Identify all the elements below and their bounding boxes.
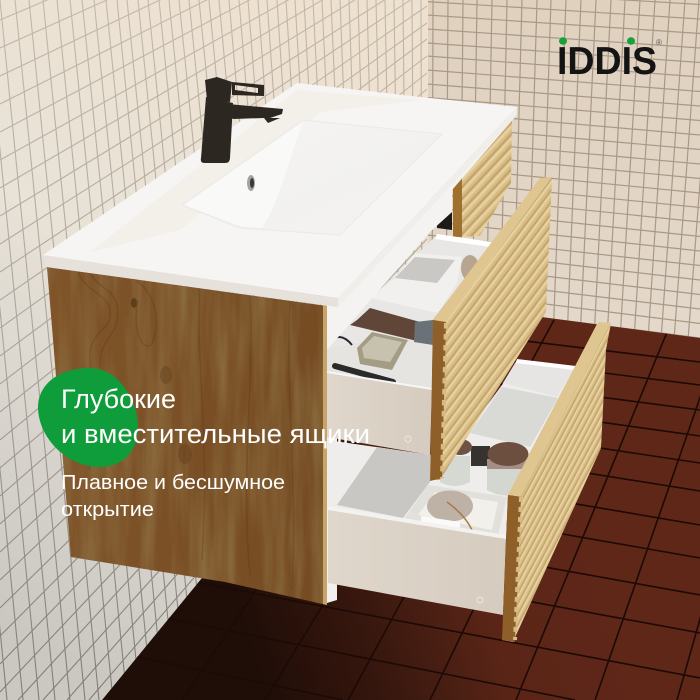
gap behind the drawer: [437, 212, 452, 230]
upper drawer side panel: [327, 373, 432, 455]
interior panel: [327, 235, 492, 390]
top band: [508, 322, 611, 497]
counter front edge: [43, 255, 338, 307]
back wall tiles: [427, 0, 700, 340]
wood knot: [178, 444, 192, 464]
faucet body: [201, 97, 233, 163]
green blob: [38, 368, 138, 467]
counter top surface: [43, 83, 517, 298]
basin slope: [184, 122, 303, 228]
counter right edge: [338, 107, 517, 307]
subheading: открытие: [61, 498, 154, 521]
cabinet wood side: [40, 260, 330, 610]
logo green dot: [559, 37, 567, 45]
left wall tiles: [0, 0, 428, 700]
closed drawer wood edge: [453, 176, 462, 237]
soap tray: [405, 485, 507, 535]
closed top drawer: [437, 120, 512, 237]
basin: [182, 120, 442, 235]
logo green dot: [627, 37, 635, 45]
back rim: [516, 359, 576, 370]
wood cathedral grain: [78, 272, 294, 590]
grey drawer floor: [337, 447, 430, 518]
brush: [350, 308, 433, 345]
soap bar: [421, 516, 460, 528]
upper open drawer interior: [327, 234, 492, 455]
subheading: Плавное и бесшумное: [61, 471, 285, 494]
pumice stone: [427, 490, 473, 522]
dark sponge: [471, 446, 490, 466]
end strip teeth: [442, 323, 446, 478]
box inner: [395, 257, 455, 283]
back rim: [435, 234, 492, 247]
wood knot: [160, 366, 172, 384]
vanity countertop: [43, 83, 517, 307]
handle loop: [232, 82, 264, 96]
lower drawer side panel: [328, 510, 506, 615]
drain hole: [247, 175, 255, 191]
wood end strip: [430, 320, 446, 481]
faucet spout: [217, 103, 283, 123]
heading: и вместительные ящики: [61, 419, 370, 449]
underside strip below counter: [327, 115, 517, 350]
black faucet: [201, 77, 283, 163]
interior base: [327, 360, 575, 540]
warm wall reflection: [90, 90, 420, 252]
perfume bottle: [357, 332, 408, 370]
tray inner: [418, 492, 498, 530]
logo wordmark: IDDIS: [557, 40, 657, 83]
wood end strip: [502, 495, 521, 642]
heading: Глубокие: [61, 384, 176, 414]
lower drawer front: [502, 322, 611, 642]
closed drawer ridged front: [453, 120, 512, 237]
hair tool: [335, 366, 393, 382]
upper drawer front: [430, 177, 552, 481]
floor tiles: [102, 305, 700, 700]
screw cap: [477, 597, 483, 603]
stone behind box: [461, 255, 479, 281]
bath mat: [327, 330, 432, 390]
lower drawer rim: [328, 506, 506, 541]
top band: [433, 177, 552, 323]
registered mark: ®: [656, 38, 662, 47]
end strip teeth: [515, 497, 521, 640]
black cable: [327, 337, 352, 345]
pumice cord: [447, 502, 472, 530]
storage box: [370, 253, 462, 313]
brown lid jar: [487, 442, 528, 496]
screw cap: [405, 436, 411, 442]
upper drawer rim: [327, 371, 432, 392]
white cabinet interior strip: [327, 300, 337, 603]
folded towel: [470, 387, 558, 447]
faucet handle: [205, 77, 232, 102]
ridged face: [431, 177, 552, 480]
left jar: [440, 439, 472, 486]
oak edge strip: [323, 300, 327, 610]
IDDIS logo: [557, 37, 662, 83]
ridged face: [502, 323, 611, 642]
wood knot: [131, 298, 137, 308]
back panel: [503, 360, 575, 397]
lower open drawer interior: [327, 359, 576, 615]
